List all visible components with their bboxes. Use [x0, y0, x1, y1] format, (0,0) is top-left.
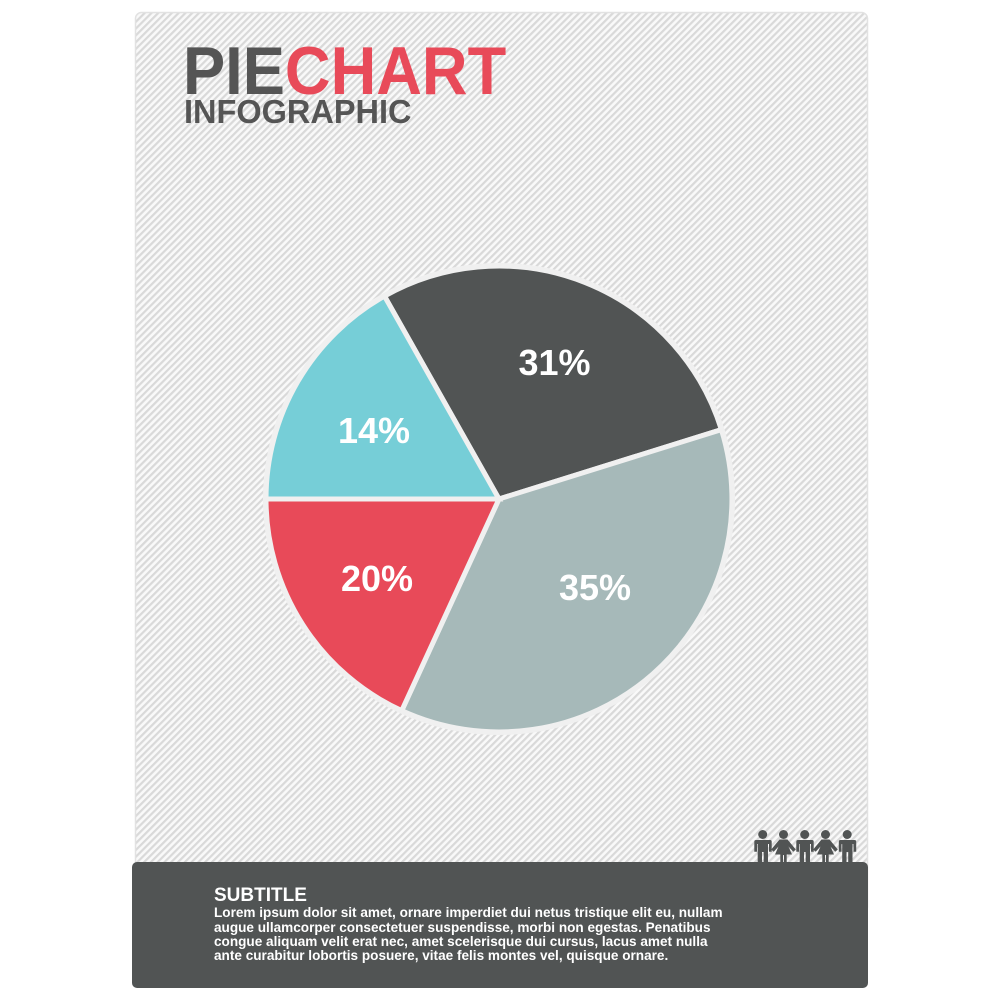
label: 35%: 35%	[559, 567, 631, 608]
footer background	[132, 862, 868, 988]
slice: 31%	[384, 266, 721, 499]
panel: footer	[132, 862, 868, 988]
slice: 35%	[402, 430, 732, 732]
body text: augue ullamcorper consectetuer suspendisse, morbi non egestas. Penatibus	[214, 920, 710, 935]
pie chart	[263, 263, 735, 735]
slice: 14%	[266, 296, 499, 499]
person 2	[771, 830, 796, 862]
slice: 20%	[266, 499, 499, 711]
label: 31%: 31%	[518, 342, 591, 383]
heading: infographic: INFOGRAPHIC	[184, 93, 411, 130]
subtitle: SUBTITLE	[214, 885, 307, 906]
icon: people row	[754, 830, 856, 862]
body text: congue aliquam velit erat nec, amet scelerisque dui cursus, lacus amet nulla	[214, 934, 708, 949]
body text: ante curabitur lobortis posuere, vitae felis montes vel, quisque ornare.	[214, 948, 668, 963]
heading: pie chart: PIECHART	[183, 33, 506, 108]
person 4	[813, 830, 838, 862]
person 3	[796, 830, 814, 862]
person 1	[754, 830, 772, 862]
body text: Lorem ipsum dolor sit amet, ornare imperdiet dui netus tristique elit eu, nullam	[214, 905, 723, 920]
label: 14%: 14%	[338, 410, 410, 451]
title	[183, 33, 506, 130]
panel: striped background	[136, 12, 868, 912]
person 5	[839, 830, 856, 862]
pie outer ring	[263, 263, 735, 735]
label: 20%: 20%	[341, 558, 413, 599]
